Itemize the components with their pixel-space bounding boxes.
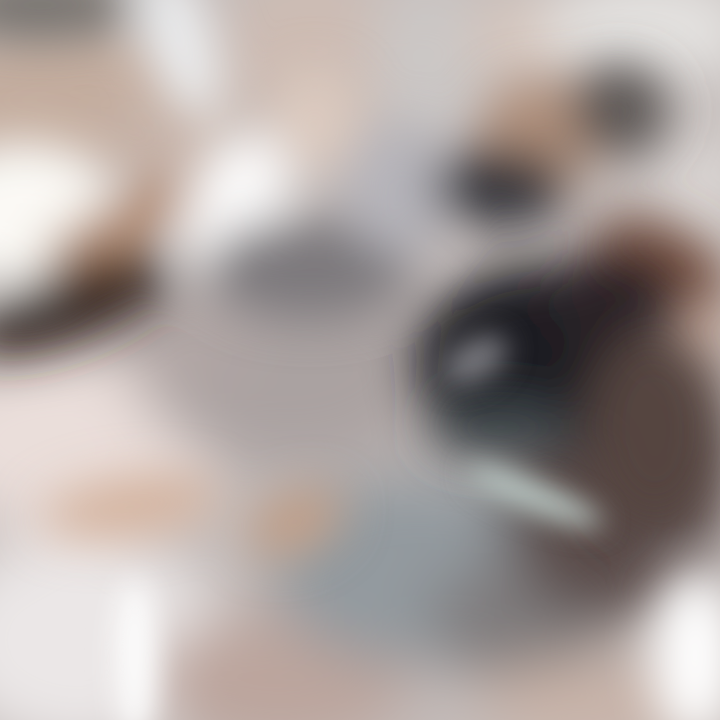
highlights	[115, 325, 607, 720]
